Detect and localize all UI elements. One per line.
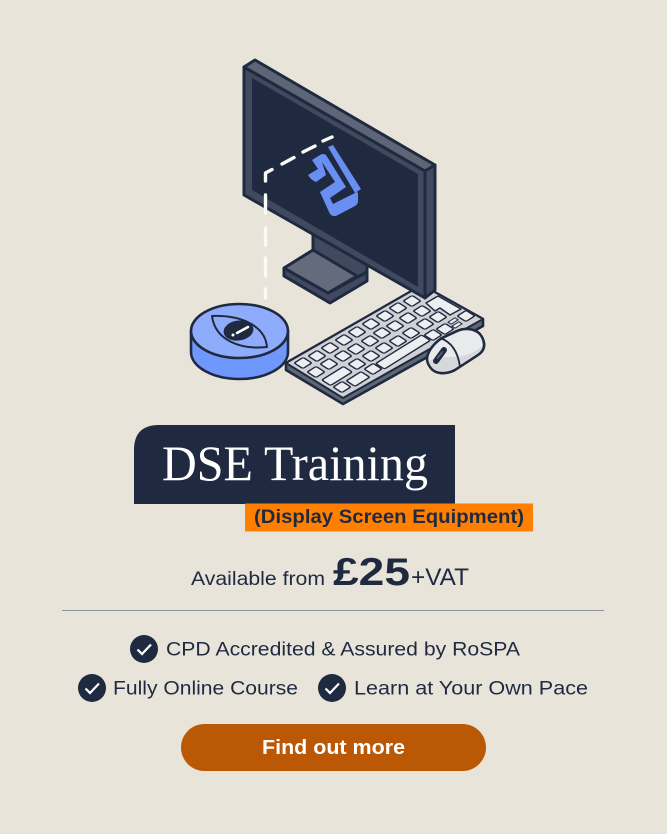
monitor xyxy=(244,60,435,298)
price: Available from xyxy=(191,569,325,590)
dashed connector line xyxy=(266,137,332,298)
keyboard xyxy=(286,285,483,404)
icon: check xyxy=(78,674,106,702)
icon: check xyxy=(318,674,346,702)
subtitle tag: (Display Screen Equipment) xyxy=(254,507,524,528)
icon: check xyxy=(130,635,158,663)
feature: CPD accredited xyxy=(130,635,520,663)
price: £25 xyxy=(333,551,410,594)
title banner xyxy=(134,425,455,504)
price: +VAT xyxy=(411,564,469,591)
feature: own pace: Learn at Your Own Pace xyxy=(354,678,588,700)
subtitle tag xyxy=(245,504,533,532)
mouse xyxy=(427,329,484,373)
button: find out more: Find out more xyxy=(262,736,405,759)
feature: fully online: Fully Online Course xyxy=(113,678,298,700)
feature: fully online xyxy=(78,674,298,702)
logo on screen xyxy=(308,145,361,216)
feature: CPD accredited: CPD Accredited & Assured by RoSPA xyxy=(166,640,520,660)
icon: eye disk xyxy=(191,304,288,379)
feature: own pace xyxy=(318,674,588,702)
illustration: computer workstation xyxy=(191,60,484,404)
price xyxy=(191,551,469,594)
monitor stand xyxy=(284,230,367,303)
button: find out more xyxy=(181,724,486,771)
title banner: DSE Training xyxy=(162,435,428,491)
